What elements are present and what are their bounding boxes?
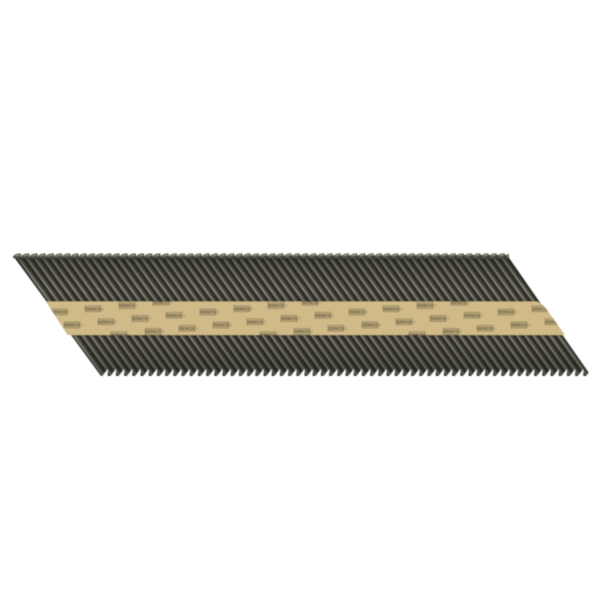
- SENCO logos printed on band: SENCO ®: [396, 319, 416, 324]
- nail heads row: [13, 252, 509, 260]
- SENCO logos printed on band: SENCO ®: [430, 316, 450, 321]
- SENCO logos printed on band: SENCO ®: [200, 310, 220, 315]
- SENCO logos printed on band: SENCO ®: [85, 306, 105, 311]
- SENCO logos printed on band: SENCO ®: [464, 313, 484, 318]
- SENCO logos printed on band: SENCO ®: [281, 316, 301, 321]
- nail shanks: [14, 255, 591, 376]
- SENCO logos printed on band: SENCO ®: [443, 329, 463, 334]
- SENCO logos printed on band: SENCO ®: [268, 303, 288, 308]
- SENCO logos printed on band: SENCO ®: [247, 319, 267, 324]
- SENCO logos printed on band: SENCO ®: [294, 329, 314, 334]
- SENCO logos printed on band: SENCO ®: [362, 323, 382, 328]
- SENCO logos printed on band: SENCO ®: [328, 326, 348, 331]
- SENCO logos printed on band: SENCO ®: [145, 329, 165, 334]
- SENCO logos printed on band: SENCO ®: [302, 300, 322, 305]
- SENCO logos printed on band: SENCO ®: [166, 313, 186, 318]
- SENCO logos printed on band: SENCO ®: [111, 332, 131, 337]
- SENCO logos printed on band: SENCO ®: [498, 310, 518, 315]
- SENCO logos printed on band: SENCO ®: [260, 332, 280, 337]
- SENCO logos printed on band: SENCO ®: [234, 306, 254, 311]
- SENCO logos printed on band: SENCO ®: [545, 319, 565, 324]
- SENCO logos printed on band: SENCO ®: [132, 316, 152, 321]
- SENCO logos printed on band: SENCO ®: [451, 300, 471, 305]
- paper collation band: [46, 299, 565, 338]
- SENCO logos printed on band: SENCO ®: [179, 326, 199, 331]
- SENCO logos printed on band: SENCO ®: [153, 300, 173, 305]
- SENCO logos printed on band: SENCO ®: [532, 306, 552, 311]
- SENCO logos printed on band: SENCO ®: [213, 323, 233, 328]
- SENCO logos printed on band: SENCO ®: [315, 313, 335, 318]
- SENCO logos printed on band: SENCO ®: [511, 323, 531, 328]
- SENCO logos printed on band: SENCO ®: [409, 332, 429, 337]
- nail tips: [100, 366, 592, 378]
- SENCO logos printed on band: SENCO ®: [477, 326, 497, 331]
- SENCO logos printed on band: SENCO ®: [51, 310, 71, 315]
- SENCO logos printed on band: SENCO ®: [64, 323, 84, 328]
- SENCO logos printed on band: SENCO ®: [349, 310, 369, 315]
- nail strip: [13, 252, 592, 378]
- SENCO logos printed on band: [51, 299, 565, 338]
- SENCO logos printed on band: SENCO ®: [98, 319, 118, 324]
- SENCO logos printed on band: SENCO ®: [383, 306, 403, 311]
- SENCO logos printed on band: SENCO ®: [417, 303, 437, 308]
- SENCO logos printed on band: SENCO ®: [119, 303, 139, 308]
